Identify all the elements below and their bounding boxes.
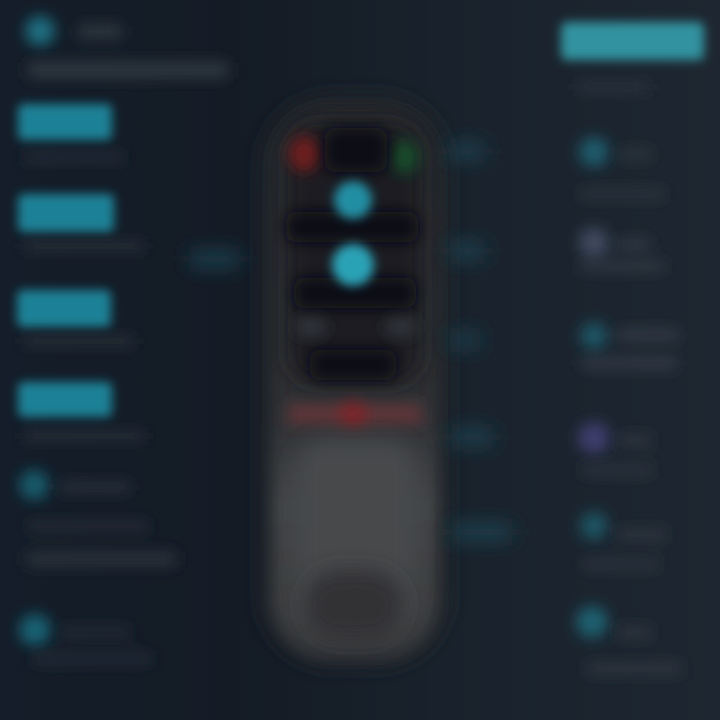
icon: left lower badge 1 xyxy=(19,470,49,500)
panel: left column xyxy=(17,16,228,663)
button rows light gaps xyxy=(296,318,416,336)
panel: callouts beside remote xyxy=(190,144,512,539)
red button strip xyxy=(288,400,422,428)
text block: right 1 xyxy=(580,150,664,198)
icon: right 4 xyxy=(578,422,610,454)
text block: right 5 xyxy=(582,530,666,568)
top button panel xyxy=(288,124,422,384)
icon: right 3 xyxy=(580,322,608,350)
text block: left 1 xyxy=(24,153,124,162)
remote body xyxy=(272,106,438,658)
icon: right 5 xyxy=(580,512,608,540)
icon: left lower badge 2 xyxy=(19,614,51,646)
text block: left 3 xyxy=(24,336,134,346)
text block: right 4 xyxy=(582,436,652,474)
icon: right 2 xyxy=(579,228,609,258)
callout 6 xyxy=(190,252,240,266)
text block: right top xyxy=(578,82,648,92)
label: left teal 4 xyxy=(18,382,112,417)
icon: right 1 xyxy=(579,137,609,167)
text block: left lower 2 xyxy=(32,628,152,663)
callout 4 xyxy=(452,430,492,444)
text block: right 6 xyxy=(586,628,682,673)
icon: right 6 xyxy=(576,606,608,638)
label: left teal 3 xyxy=(17,290,111,327)
lower pad xyxy=(296,440,416,630)
text block: left 2 xyxy=(24,241,144,251)
remote control xyxy=(262,96,448,666)
label: left teal 2 xyxy=(18,194,114,232)
callout 3 xyxy=(450,334,480,346)
icon: top left badge xyxy=(25,16,55,46)
button: teal upper xyxy=(334,181,372,219)
text block: left 4 xyxy=(24,431,144,441)
text block: right 2 xyxy=(580,240,664,270)
button: red xyxy=(289,136,319,172)
callout 5 xyxy=(452,525,512,539)
text block: right 3 xyxy=(582,330,678,368)
callout 1 xyxy=(450,144,484,158)
label: left teal 1 xyxy=(18,104,112,140)
shadow halo xyxy=(262,96,448,666)
panel: right column xyxy=(561,22,704,673)
pad inner shade xyxy=(304,570,404,640)
heading: top right teal pill xyxy=(561,22,704,60)
button: teal lower xyxy=(332,244,374,286)
button rows xyxy=(286,128,418,380)
button: green xyxy=(392,140,418,174)
callout 2 xyxy=(450,244,484,258)
text block: left lower 1 xyxy=(26,482,176,566)
heading: top left xyxy=(28,25,228,78)
